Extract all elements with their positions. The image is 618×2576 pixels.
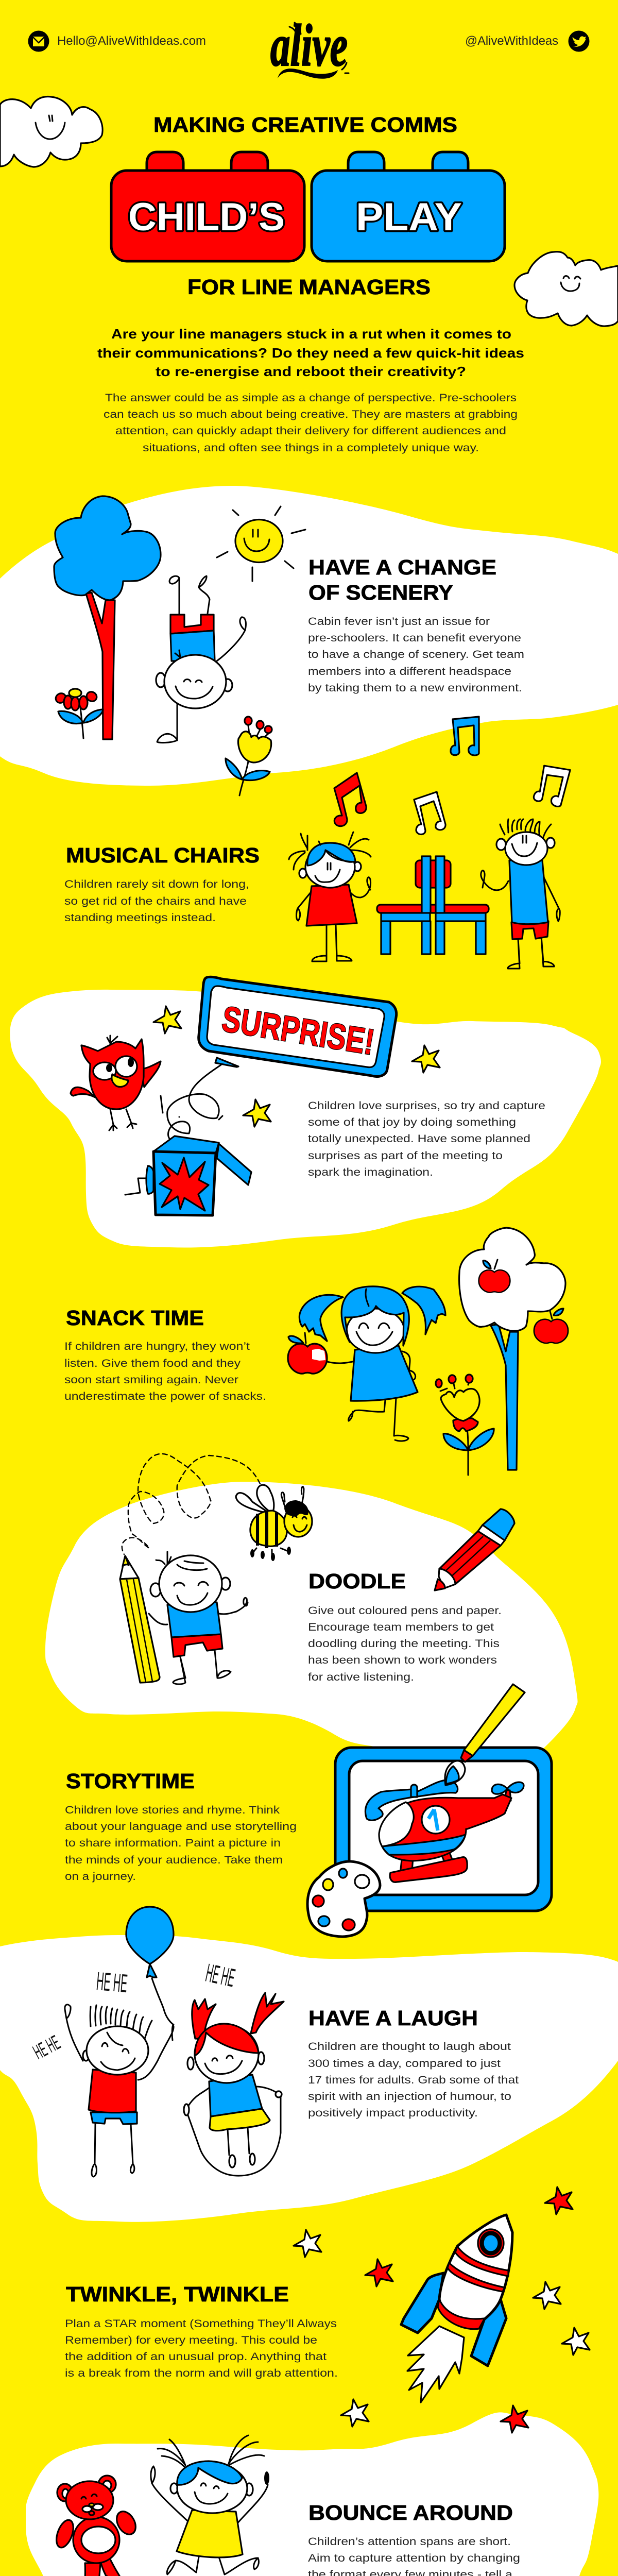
icon: girl with apple [288,1286,445,1441]
icon: white star left [294,2230,321,2257]
icon: girl in red dress [289,832,371,961]
panel: white blob surprise [10,990,601,1247]
icon: white star far right [562,2328,590,2355]
intro body [104,392,518,454]
body: doodle: Encourage team members to get [308,1621,494,1633]
intro question: to re-energise and reboot their creativity? [156,364,466,379]
heading: have a laugh: HAVE A LAUGH [308,2006,478,2030]
intro body: can teach us so much about being creative. They are masters at grabbing [104,409,518,420]
section: storytime [65,1684,552,1937]
body: doodle: has been shown to work wonders [308,1654,497,1666]
body: twinkle twinkle: is a break from the norm and will grab attention. [65,2367,338,2379]
body: snack time: listen. Give them food and they [64,1358,241,1369]
heading: have a change of scenery: HAVE A CHANGE [308,555,496,579]
body: doodle: doodling during the meeting. This [308,1638,500,1650]
body: storytime: about your language and use storytelling [65,1821,297,1833]
body: storytime: Children love stories and rhyme. Think [65,1804,280,1816]
body: twinkle twinkle: Remember) for every meeting. This could be [65,2334,317,2346]
title: for line managers: FOR LINE MANAGERS [187,275,431,299]
icon: surprise sign [199,977,397,1076]
icon: upside down boy [156,576,246,743]
intro question: Are your line managers stuck in a rut when it comes to [111,326,511,342]
body: surprise: surprises as part of the meeting to [308,1150,503,1162]
icon: tulip [226,717,272,795]
icon: white apple tree [459,1228,568,1470]
cloud: top right [514,252,618,326]
he he laugh words [30,1958,237,2064]
body: snack time: soon start smiling again. Never [64,1374,238,1386]
heading: have a change of scenery [308,555,496,604]
body: twinkle twinkle [65,2318,338,2379]
body: doodle: for active listening. [308,1671,414,1683]
intro body: attention, can quickly adapt their delivery for different audiences and [115,425,506,437]
icon: white star lower [341,2399,369,2427]
panel: white blob bounce around [26,2412,598,2576]
body: bounce around: Children’s attention spans are short. [308,2536,511,2548]
title block: blue brick play: PLAY [356,195,462,239]
bee flight trail [122,1454,260,1554]
section: musical chairs [64,819,560,969]
intro question [97,326,524,379]
intro body: situations, and often see things in a completely unique way. [143,442,479,454]
body: storytime: to share information. Paint a picture in [65,1837,281,1849]
section: twinkle twinkle [65,2187,590,2433]
cloud: top left [0,97,102,167]
intro question: their communications? Do they need a few quick-hit ideas [97,345,524,361]
body: doodle [308,1605,502,1683]
icon: two chairs [377,856,489,954]
body: bounce around: Aim to capture attention by changing [308,2552,520,2564]
body: snack time: underestimate the power of snacks. [64,1391,266,1402]
icon: boy with pencil [149,1552,248,1684]
body: storytime [65,1804,297,1883]
section: have a laugh: HE HE [203,1958,237,1992]
icon: red star lower [501,2405,528,2433]
heading: storytime: STORYTIME [66,1769,195,1793]
icon: surprise sign: SURPRISE! [219,998,377,1062]
body: scenery: to have a change of scenery. Get team [308,649,524,660]
title block: red brick childs [111,152,304,261]
icon: red music note [334,773,366,826]
he he laugh words: HE HE [95,1967,129,1998]
body: have a laugh: 17 times for adults. Grab some of that [308,2074,519,2086]
intro body: The answer could be as simple as a change of perspective. Pre-schoolers [105,392,517,404]
icon: bouncing girl [151,2435,269,2574]
icon: rocket [401,2215,512,2402]
header email: Hello@AliveWithIdeas.com [57,34,206,48]
body: have a laugh: 300 times a day, compared to just [308,2058,501,2070]
body: scenery: by taking them to a new environment. [308,682,522,694]
section: bounce around [53,2435,520,2576]
icon: yellow star two [412,1045,440,1073]
body: have a laugh: spirit with an injection of humour, to [308,2091,511,2103]
logo: alive: alive [270,13,348,78]
header twitter: @AliveWithIdeas [465,34,558,48]
icon: yellow star three [243,1099,271,1127]
title block: blue brick play [312,152,505,261]
body: snack time [64,1341,266,1402]
body: have a laugh: positively impact productivity. [308,2107,478,2119]
icon: white star right [533,2282,561,2309]
icon: paint brush [445,1684,525,1785]
icon: jack in the box [125,1136,251,1215]
body: surprise: spark the imagination. [308,1166,433,1178]
icon: red flower [54,689,103,738]
section: have a laugh [30,1907,519,2177]
icon: white music note [533,762,570,807]
body: storytime: on a journey. [65,1871,136,1883]
icon: paint palette [307,1861,380,1937]
icon: red star top right [545,2187,573,2214]
icon: boy laughing [65,2005,174,2177]
body: scenery: members into a different headspace [308,666,511,677]
body: surprise: Children love surprises, so try and capture [308,1100,545,1112]
body: twinkle twinkle: the addition of an unusual prop. Anything that [65,2351,327,2363]
icon: canvas picture frame [335,1748,552,1911]
icon: yellow tulip [436,1375,494,1475]
heading: doodle: DOODLE [308,1569,406,1593]
body: storytime: the minds of your audience. Take them [65,1854,283,1866]
body: doodle: Give out coloured pens and paper. [308,1605,502,1617]
body: snack time: If children are hungry, they won’t [64,1341,250,1352]
icon: red teddy bear [53,2476,140,2576]
icon: girl skipping rope [184,1993,284,2176]
icon: sun [217,506,305,581]
section: doodle [120,1454,514,1684]
icon: yellow pencil [120,1556,160,1683]
body: surprise: some of that joy by doing something [308,1116,516,1128]
icon: blue music note [451,717,479,755]
section: have a change of scenery [54,496,524,795]
body: musical chairs: so get rid of the chairs and have [64,895,247,907]
body: scenery [308,616,524,694]
icon: red star left [365,2259,393,2286]
heading: have a change of scenery: OF SCENERY [308,581,453,604]
heading: bounce around: BOUNCE AROUND [308,2501,513,2524]
body: have a laugh: Children are thought to laugh about [308,2041,511,2053]
body: musical chairs [64,878,249,924]
body: scenery: Cabin fever isn’t just an issue for [308,616,490,628]
icon: blue balloon [126,1907,174,2025]
body: bounce around [308,2536,520,2576]
icon: email [28,31,49,52]
body: surprise [308,1100,545,1178]
icon: jack in the box spring [161,1065,222,1139]
body: musical chairs: Children rarely sit down for long, [64,878,249,890]
heading: snack time: SNACK TIME [66,1306,204,1330]
body: scenery: pre-schoolers. It can benefit everyone [308,632,521,644]
icon: owl [71,1036,161,1130]
icon: white middle music note [414,792,445,835]
heading: musical chairs: MUSICAL CHAIRS [66,843,260,867]
icon: blue tree [54,496,161,739]
body: surprise: totally unexpected. Have some planned [308,1133,530,1145]
logo: alive [270,13,349,79]
title: making creative comms: MAKING CREATIVE COMMS [153,113,457,137]
panel: white blob have a laugh [0,1935,618,2222]
heading: twinkle twinkle: TWINKLE, TWINKLE [66,2282,289,2306]
body: twinkle twinkle: Plan a STAR moment (Something They’ll Always [65,2318,337,2330]
section: snack time [64,1228,568,1475]
icon: boy in blue shirt [481,819,560,969]
he he laugh words: HE HE [30,2031,64,2064]
section: surprise [71,977,545,1215]
body: have a laugh [308,2041,519,2119]
title block: red brick childs: CHILD’S [128,195,285,239]
icon: yellow star one [153,1006,181,1033]
icon: twitter [569,31,589,52]
icon: bee [236,1485,312,1561]
header bar [28,13,589,79]
panel: white blob change of scenery [0,486,618,786]
icon: helicopter painting [365,1780,524,1882]
icon: red pencil [435,1509,514,1590]
panel: white blob doodle [45,1482,578,1748]
body: musical chairs: standing meetings instead. [64,912,216,924]
